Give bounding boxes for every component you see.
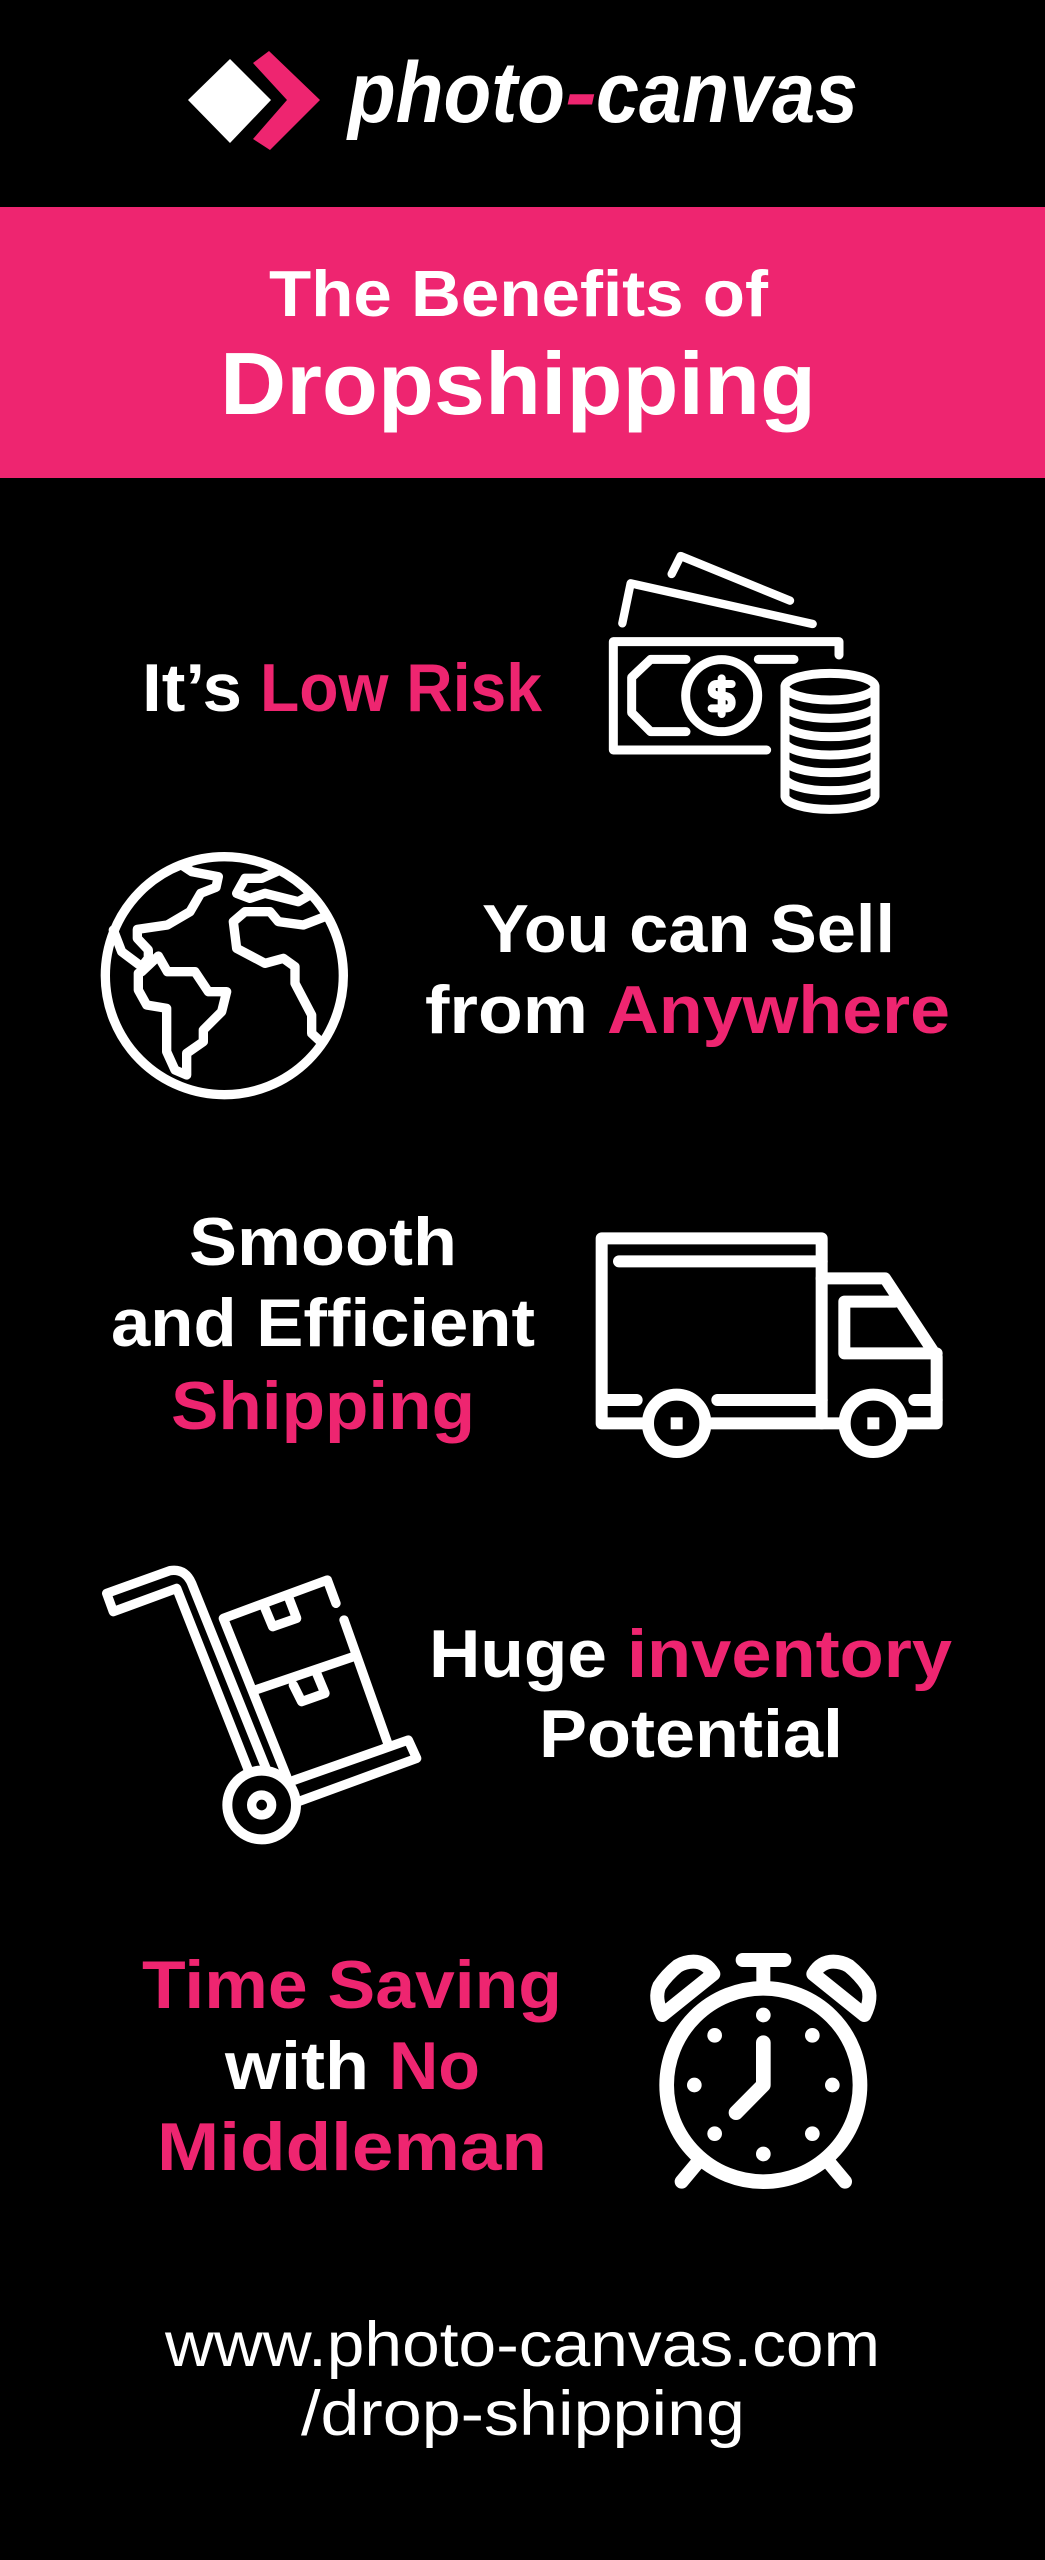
benefit 5 text: Time Saving — [142, 1947, 562, 2023]
benefit 1 text — [142, 650, 542, 726]
benefit 3 text — [111, 1204, 535, 1444]
benefit 2 text: You can Sell — [482, 891, 895, 967]
benefit 2 text: Anywhere — [607, 972, 950, 1048]
logo wordmark: canvas — [596, 45, 858, 141]
benefit 4 text: inventory — [627, 1616, 952, 1692]
title line 2: Dropshipping — [220, 334, 816, 433]
logo wordmark: photo — [346, 45, 565, 141]
benefit 1 text: Low Risk — [260, 650, 542, 726]
icon: alarm clock — [657, 1960, 869, 2182]
benefit 4 text — [429, 1616, 952, 1772]
benefit 3 text: Shipping — [171, 1368, 475, 1444]
logo wordmark — [346, 45, 858, 141]
benefit 5 text: No — [389, 2028, 480, 2104]
benefit 3 text: and Efficient — [111, 1285, 535, 1361]
icon: delivery truck — [602, 1238, 937, 1452]
logo — [188, 45, 858, 150]
benefit 4 text: Potential — [539, 1696, 843, 1772]
title band — [0, 207, 1045, 478]
benefit 5 text: Middleman — [157, 2109, 547, 2185]
icon: money and coins — [613, 556, 875, 809]
benefit 1 text: It’s — [142, 650, 242, 726]
website url: www.photo-canvas.com — [164, 2310, 880, 2380]
benefit 4 text: Huge — [429, 1616, 607, 1692]
website url — [164, 2310, 880, 2449]
logo mark — [188, 51, 320, 150]
benefit 5 text: with — [224, 2028, 369, 2104]
benefit 5 text — [142, 1947, 562, 2185]
icon: globe — [105, 857, 343, 1095]
website url: /drop-shipping — [301, 2379, 745, 2449]
icon: hand truck with boxes — [107, 1570, 417, 1839]
title line 1: The Benefits of — [269, 257, 768, 330]
benefit 3 text: Smooth — [189, 1204, 457, 1280]
logo wordmark: - — [565, 45, 597, 141]
benefit 2 text — [425, 891, 950, 1048]
benefit 2 text: from — [425, 972, 588, 1048]
